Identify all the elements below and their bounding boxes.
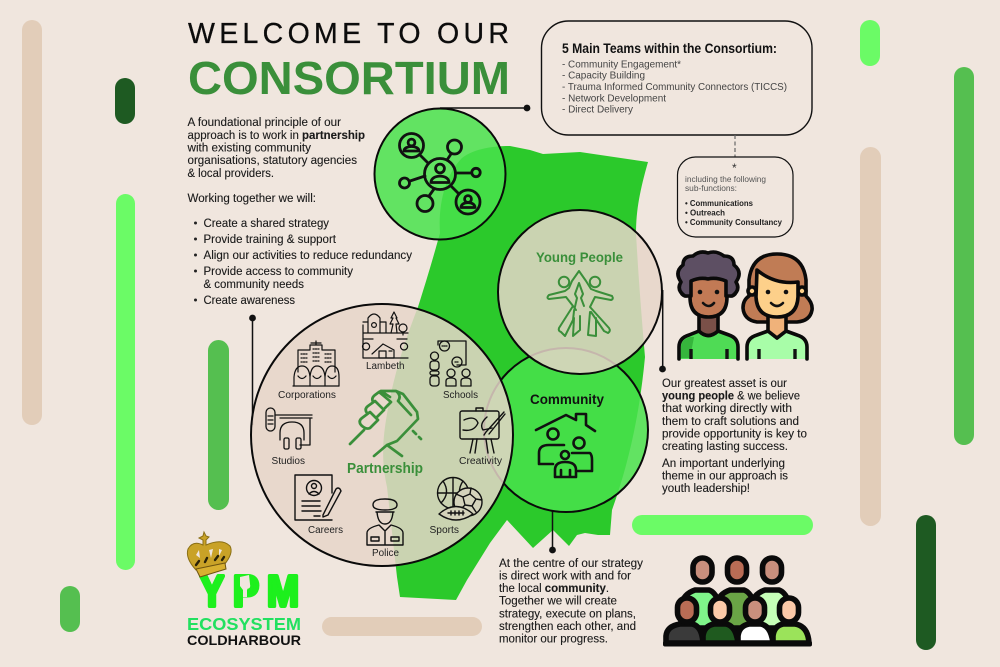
intro text: & local providers. [188,166,274,180]
letters: YPM: P [233,567,259,616]
community text [499,556,644,646]
young people text: Our greatest asset is our [662,376,787,390]
icon: young man [678,252,739,359]
icon: family house [536,414,595,477]
icon: corporations [293,341,339,386]
intro text: organisations, statutory agencies [188,153,357,167]
list of teams [562,59,787,116]
icon: careers [295,475,341,520]
young people text: that working directly with [662,401,792,415]
connector: young people [659,290,666,372]
icon: police [367,499,403,545]
community text: Together we will create [499,594,617,608]
letters: YPM [200,567,299,616]
community text: monitor our progress. [499,632,608,646]
heading: community: Community [530,391,604,407]
panel: sub-functions: * [732,161,737,175]
community text: At the centre of our strategy [499,556,644,570]
list of teams: - Capacity Building [562,71,645,82]
community text: is direct work with and for [499,569,631,583]
young people text: theme in our approach is [662,468,788,482]
title: WELCOME TO OUR [188,18,509,50]
connector: community [549,510,556,553]
icon: crowd [663,558,812,646]
title [188,18,510,104]
letters: YPM: Y [200,567,224,616]
intro text: Working together we will: [188,191,316,205]
icon: crown [187,532,231,577]
young people text: creating lasting success. [662,439,788,453]
list of teams: - Trauma Informed Community Connectors (TICCS) [562,82,787,93]
panel: sub-functions [678,157,793,237]
panel: sub-functions: including the following [685,175,766,184]
panel: sub-functions: • Community Consultancy [685,218,783,227]
panel: sub-functions: • Communications [685,199,754,208]
list of commitments [194,216,413,307]
heading: main teams: 5 Main Teams within the Consortium: [562,41,777,56]
intro text: with existing community [187,140,312,154]
intro text [187,115,365,205]
intro text: approach is to work in partnership [188,128,365,142]
icon: lambeth [363,312,408,358]
panel: teams circle [374,108,506,240]
heading: partnership: Partnership [347,461,423,477]
letters: YPM: M [267,567,299,616]
label: corporations: Corporations [278,390,336,401]
list of teams: - Community Engagement* [562,59,681,70]
connector: partnership [249,315,256,425]
green blob backdrop [383,146,648,600]
community text: the local community. [499,581,609,595]
list of commitments: Align our activities to reduce redundancy [204,248,413,262]
label: studios: Studios [272,456,305,467]
intro text: A foundational principle of our [188,115,341,129]
list of teams: - Network Development [562,93,666,104]
logo: ECOSYSTEM [187,614,301,634]
label: schools: Schools [443,390,478,401]
icon: studios [266,408,312,449]
label: sports: Sports [430,525,459,536]
logo [187,532,301,648]
panel: 5 main teams [542,21,812,135]
young people text: them to craft solutions and [662,414,799,428]
icon: creativity [460,408,505,453]
icon: network [400,134,480,214]
panel: partnership circle [251,304,513,566]
young people text: An important underlying [662,456,785,470]
panel: young people circle [498,210,662,374]
list of commitments: & community needs [204,277,304,291]
community text: strategy, execute on plans, [499,606,636,620]
young people text: young people & we believe [662,389,800,403]
label: lambeth: Lambeth [366,361,404,372]
icon: handshake [350,391,421,456]
panel: sub-functions: sub-functions: [685,184,737,193]
young people text: youth leadership! [662,481,750,495]
list of commitments: Create a shared strategy [204,216,330,230]
young people text [662,376,807,495]
title: CONSORTIUM [188,52,510,104]
list of teams: - Direct Delivery [562,105,634,116]
list of commitments: Create awareness [204,293,295,307]
list of commitments: Provide training & support [204,232,337,246]
connector: teams [440,105,530,111]
label: creativity: Creativity [459,456,502,467]
panel: sub-functions: • Outreach [685,208,725,218]
label: police: Police [372,548,399,559]
icon: young woman [743,254,812,359]
panel: community circle [484,348,648,512]
icon: sports [438,478,482,520]
icon: high five [548,271,613,336]
icon: raised fist [240,575,250,597]
young people text: provide opportunity is key to [662,427,807,441]
label: careers: Careers [308,525,343,536]
logo: COLDHARBOUR [187,632,301,648]
list of commitments: Provide access to community [204,264,354,278]
icon: schools [430,341,471,386]
heading: young people: Young People [536,250,623,265]
community text: strengthen each other, and [499,619,636,633]
